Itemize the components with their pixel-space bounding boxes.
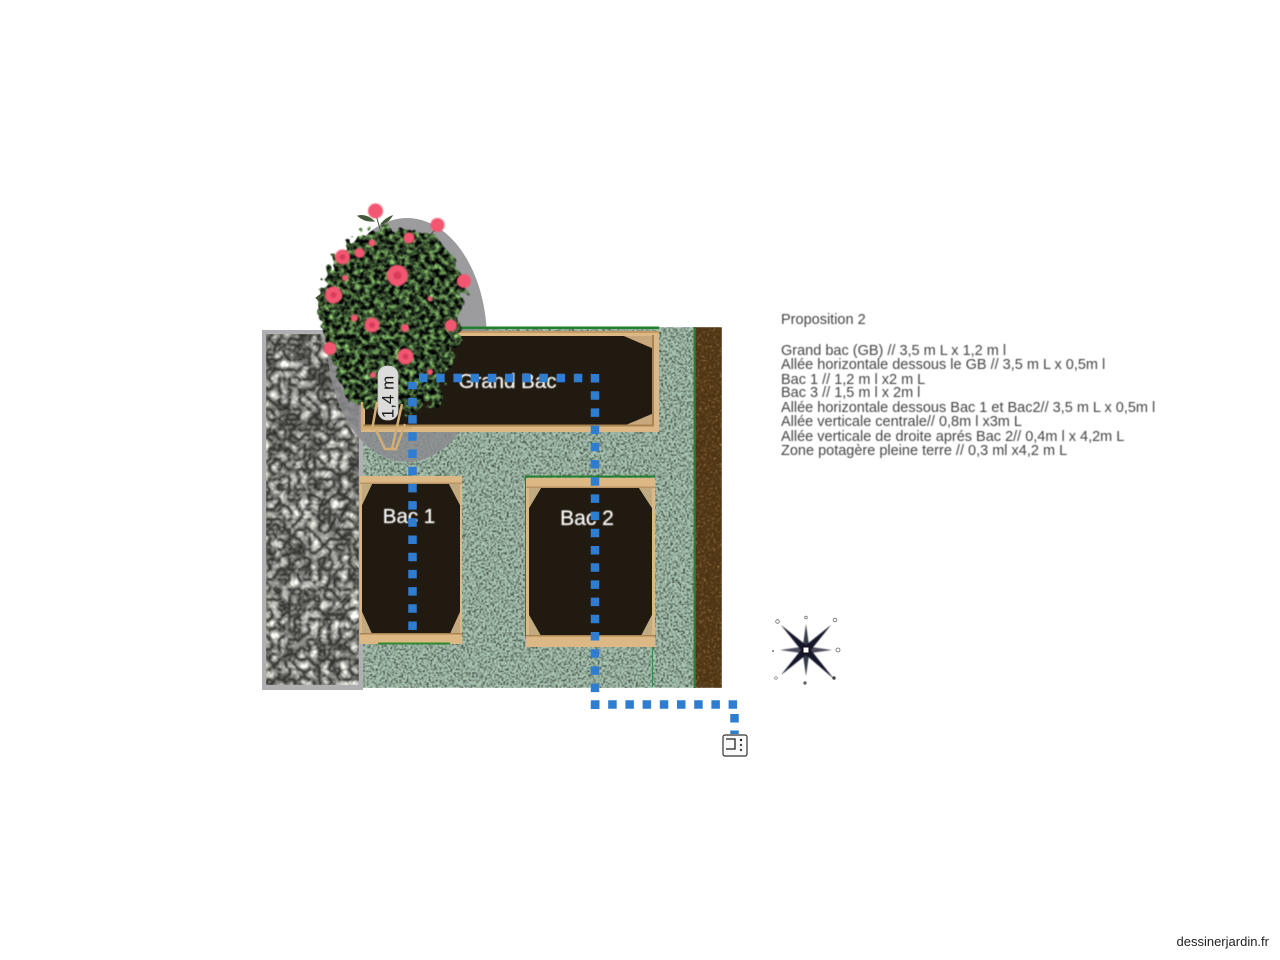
grey tree canopy ellipse <box>327 218 487 462</box>
planter label: Bac 2: Bac 2 <box>560 507 614 530</box>
planter label: Grand Bac: Grand Bac <box>458 370 556 393</box>
notes list: Bac 3 // 1,5 m l x 2m l <box>781 385 920 401</box>
stone gravel strip <box>262 330 363 690</box>
icon: water tap box <box>723 735 747 756</box>
notes list: Allée verticale de droite aprés Bac 2// 0,4m l x 4,2m L <box>781 429 1124 445</box>
icon: compass rose <box>772 616 840 685</box>
panel: Grand Bac planter <box>361 326 659 432</box>
trellis under rose <box>361 402 412 449</box>
foliage <box>318 226 466 414</box>
notes list: Zone potagère pleine terre // 0,3 ml x4,2 m L <box>781 443 1067 459</box>
planting soil strip <box>694 327 722 688</box>
credit: dessinerjardin.fr <box>1176 934 1270 949</box>
text block: proposition notes <box>781 312 1155 459</box>
irrigation dotted line <box>412 374 739 734</box>
panel: Bac 1 planter <box>360 476 462 644</box>
notes list <box>781 343 1155 459</box>
rose bush <box>316 204 471 414</box>
stems and outer leaves <box>316 215 464 302</box>
notes list: Allée horizontale dessous Bac 1 et Bac2// 3,5 m L x 0,5m l <box>781 400 1155 416</box>
planter label: Bac 1: Bac 1 <box>383 505 435 528</box>
panel: garden plan <box>262 204 739 734</box>
flowers <box>324 204 471 378</box>
notes list: Allée verticale centrale// 0,8m l x3m L <box>781 414 1022 430</box>
notes list: Bac 1 // 1,2 m l x2 m L <box>781 372 925 388</box>
notes heading: Proposition 2 <box>781 312 866 328</box>
notes list: Grand bac (GB) // 3,5 m L x 1,2 m l <box>781 343 1006 359</box>
notes list: Allée horizontale dessous le GB // 3,5 m L x 0,5m l <box>781 357 1105 373</box>
height label 1,4 m: 1,4 m <box>378 376 398 418</box>
panel: Bac 2 planter <box>525 476 655 687</box>
green gravel alleys <box>360 327 696 688</box>
